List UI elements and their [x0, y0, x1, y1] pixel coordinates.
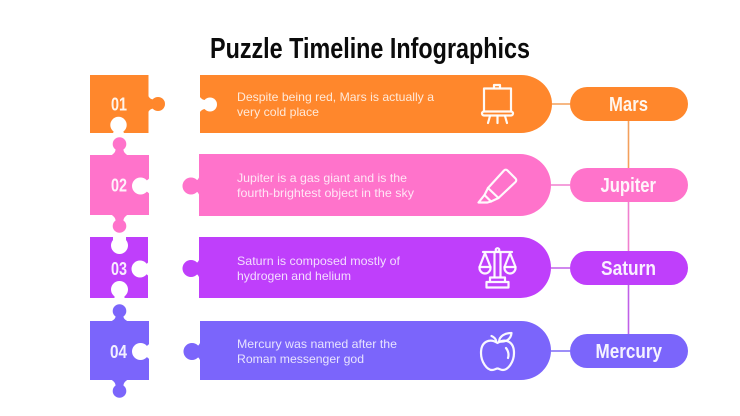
text: Mars description: [237, 90, 434, 119]
text: Saturn description: [237, 254, 401, 283]
text: Mars description: Despite being red, Mars is actually a: [237, 90, 434, 104]
text: Mercury description: [237, 337, 397, 366]
text: Mercury description: Roman messenger god: [237, 352, 364, 366]
icon: scales: [480, 248, 516, 288]
text: Mars description: very cold place: [237, 105, 319, 119]
text: Jupiter description: fourth-brightest object in the sky: [237, 186, 414, 200]
text: Mercury description: Mercury was named after the: [237, 337, 397, 351]
pill: Jupiter: [570, 168, 688, 202]
pill: Saturn: [570, 251, 688, 285]
text: Saturn description: Saturn is composed mostly of: [237, 254, 401, 268]
pill: Mars: [570, 87, 688, 121]
bar: Saturn: [182, 237, 551, 298]
puzzle piece 01: [90, 75, 165, 134]
puzzle piece 02: 02: [111, 176, 127, 196]
puzzle piece 03: 03: [111, 259, 127, 279]
pill: Mercury: Mercury: [596, 341, 663, 363]
icon: apple: [481, 333, 514, 370]
pill: Mars: Mars: [609, 94, 648, 116]
icon: easel: [482, 85, 513, 123]
puzzle piece 04: [90, 304, 150, 398]
text: Jupiter description: [237, 171, 414, 200]
pill: Jupiter: Jupiter: [600, 175, 656, 197]
pill: Saturn: Saturn: [601, 258, 656, 280]
text: Saturn description: hydrogen and helium: [237, 269, 351, 283]
connector lines: [551, 104, 628, 351]
puzzle piece 02: [90, 137, 150, 233]
bar: Mars: [199, 75, 552, 133]
pill: Mercury: [570, 334, 688, 368]
bar: Mercury: [183, 321, 551, 380]
puzzle piece 04: 04: [110, 342, 127, 362]
puzzle piece 03: [90, 236, 149, 299]
icon: highlighter: [478, 170, 516, 202]
bar: Jupiter: [182, 154, 551, 216]
text: Jupiter description: Jupiter is a gas giant and is the: [237, 171, 407, 185]
puzzle piece 01: 01: [111, 94, 127, 114]
title: Puzzle Timeline Infographics: [210, 33, 530, 65]
